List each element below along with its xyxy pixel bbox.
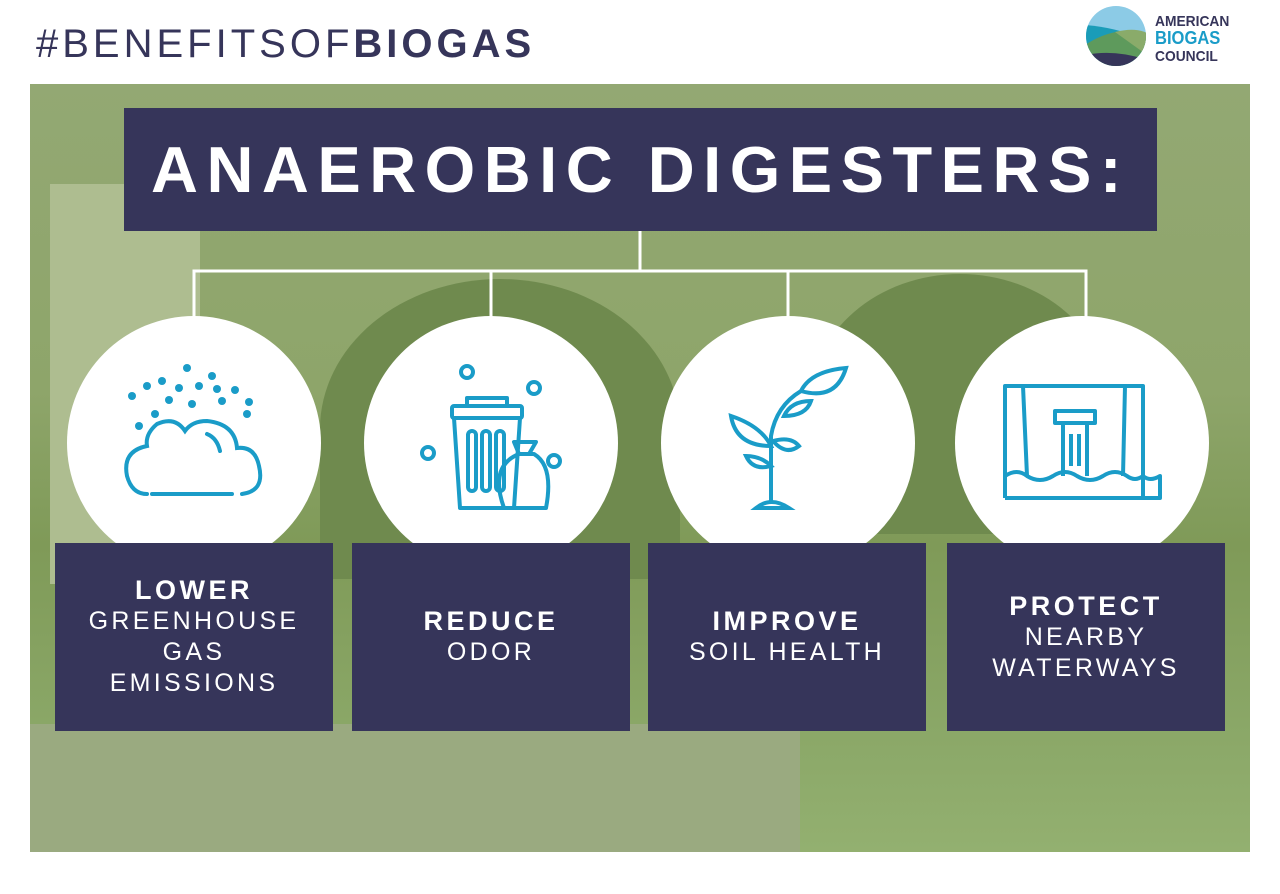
title box (124, 108, 1157, 231)
hashtag header: #BENEFITSOFBIOGAS (36, 22, 535, 66)
circle: plant icon (661, 316, 915, 570)
box: protect nearby waterways: NEARBY (1025, 622, 1147, 650)
box: lower greenhouse gas emissions (55, 543, 333, 731)
box: lower greenhouse gas emissions: EMISSIONS (110, 669, 278, 697)
box: lower greenhouse gas emissions: GREENHOUSE (89, 607, 299, 635)
box: reduce odor: ODOR (447, 638, 535, 666)
circle: water/dam icon (955, 316, 1209, 570)
box: reduce odor: REDUCE (423, 606, 558, 636)
logo (1086, 6, 1229, 66)
box: protect nearby waterways: WATERWAYS (992, 654, 1180, 682)
box: lower greenhouse gas emissions: LOWER (135, 575, 253, 605)
logo: AMERICAN (1155, 13, 1229, 30)
title box: ANAEROBIC DIGESTERS: (151, 133, 1130, 206)
logo: BIOGAS (1155, 28, 1220, 48)
box: reduce odor (352, 543, 630, 731)
box: improve soil health: SOIL HEALTH (689, 638, 885, 666)
box: improve soil health: IMPROVE (712, 606, 862, 636)
circle: cloud icon (67, 316, 321, 570)
box: protect nearby waterways: PROTECT (1009, 590, 1163, 620)
circle: trash icon (364, 316, 618, 570)
box: protect nearby waterways (947, 543, 1225, 731)
box: lower greenhouse gas emissions: GAS (163, 638, 225, 666)
box: improve soil health (648, 543, 926, 731)
logo: COUNCIL (1155, 48, 1218, 65)
